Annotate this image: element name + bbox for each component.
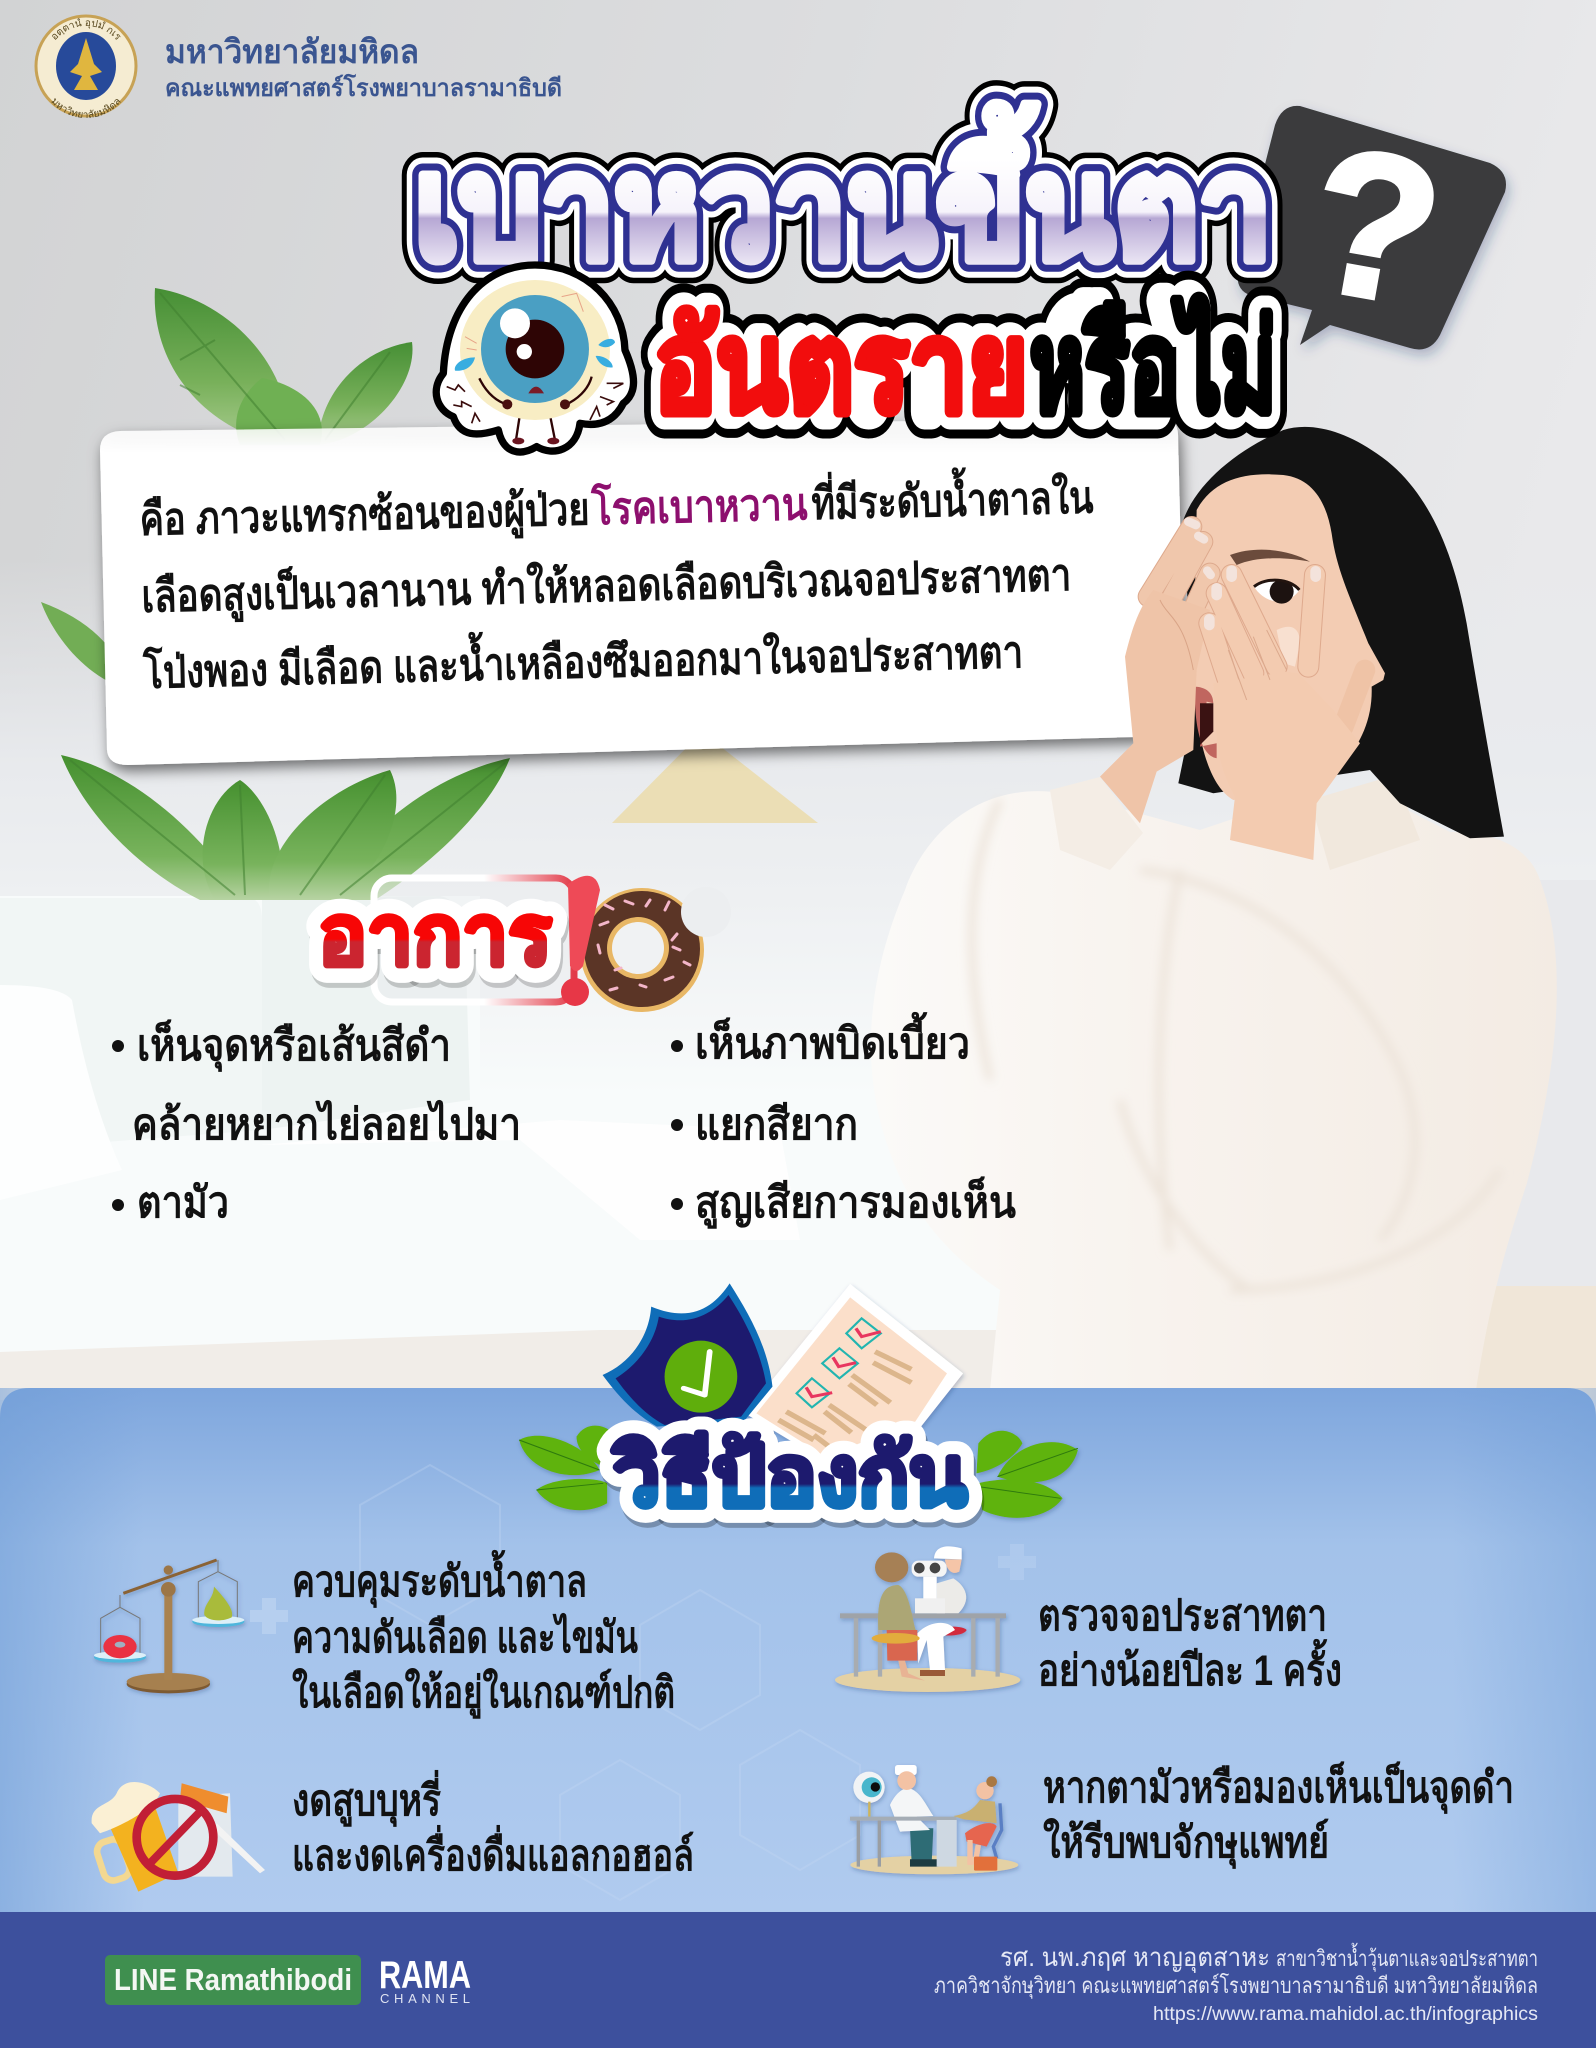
symptoms list right: สูญเสียการมองเห็น <box>695 1176 1017 1229</box>
icon: eye exam <box>835 1546 1020 1692</box>
eye <box>1254 580 1299 601</box>
icon: doctor consultation <box>850 1765 1018 1874</box>
header text: คณะแพทยศาสตร์โรงพยาบาลรามาธิบดี <box>165 73 562 102</box>
symptoms list right: เห็นภาพบิดเบี้ยว <box>695 1011 970 1068</box>
symptoms list left: เห็นจุดหรือเส้นสีดำ <box>137 1019 451 1073</box>
background: living room <box>0 0 1596 1400</box>
title line 2: หรือไม่ <box>1030 296 1276 438</box>
symptoms heading <box>318 876 731 1012</box>
header text <box>165 33 562 102</box>
prevention text left: ในเลือดให้อยู่ในเกณฑ์ปกติ <box>292 1667 675 1719</box>
plant <box>41 288 510 900</box>
header logo: มหาวิทยาลัยมหิดล <box>52 98 121 118</box>
icon: scale <box>94 1560 244 1693</box>
title line 1: เบาหวานขึ้นตา <box>414 102 1272 289</box>
prevention text left: ความดันเลือด และไขมัน <box>292 1612 638 1662</box>
RAMA channel logo <box>379 1954 471 2006</box>
hair <box>1178 427 1504 838</box>
panel: prevention <box>0 1388 1596 1915</box>
symptoms list right: แยกสียาก <box>695 1101 858 1149</box>
title line 2: อันตราย <box>654 297 1028 438</box>
leaves <box>519 1426 1078 1518</box>
title line 2: อันตรายหรือไม่ <box>654 296 1276 438</box>
prevention text left: ควบคุมระดับน้ำตาล <box>292 1549 587 1609</box>
eye character <box>436 265 634 452</box>
definition text: โรคเบาหวาน <box>590 477 808 534</box>
header text: มหาวิทยาลัยมหิดล <box>165 33 419 70</box>
lamp <box>612 732 818 823</box>
definition text: ที่มีระดับน้ำตาลใน <box>811 464 1094 529</box>
RAMA channel logo: RAMA <box>379 1954 471 1997</box>
definition text: โป่งพอง มีเลือด และน้ำเหลืองซึมออกมาในจอประสาทตา <box>142 618 1024 698</box>
title line 1: เบาหวานขึ้นตา <box>414 102 1272 289</box>
prevention text right: อย่างน้อยปีละ 1 ครั้ง <box>1038 1638 1342 1695</box>
prevention text right: ตรวจจอประสาทตา <box>1038 1592 1327 1640</box>
icons: shield and checklist <box>519 1283 1078 1518</box>
prevention text right: ให้รีบพบจักษุแพทย์ <box>1043 1817 1329 1870</box>
definition text <box>138 464 1098 698</box>
heading text: อาการ <box>318 888 552 982</box>
heading: prevention: วิธีป้องกัน <box>611 1429 967 1523</box>
header logo: อตฺตานํ อุปมํ กเร <box>52 18 121 40</box>
right hand <box>1209 571 1365 860</box>
symptoms list left: ตามัว <box>137 1179 229 1227</box>
question bubble <box>1238 103 1506 350</box>
frame <box>374 878 574 1002</box>
prevention text right <box>1038 1592 1514 1870</box>
shield <box>603 1283 772 1427</box>
icon: donut <box>580 887 731 1012</box>
LINE badge: LINE Ramathibodi <box>114 1962 352 1997</box>
RAMA channel logo: CHANNEL <box>380 1991 470 2006</box>
icon: no beer no cigarettes <box>92 1782 265 1892</box>
symptoms list left <box>112 1019 521 1227</box>
sweater <box>871 791 1557 1390</box>
prevention text left: และงดเครื่องดื่มแอลกอฮอล์ <box>292 1825 694 1880</box>
exclamation mark <box>561 876 600 1006</box>
title line 1: เบาหวานขึ้นตา <box>414 102 1272 289</box>
heading: prevention: วิธีป้องกัน <box>613 1434 969 1528</box>
footer credits: รศ. นพ.ภฤศ หาญอุตสาหะ <box>1000 1942 1270 1973</box>
title line 1: เบาหวานขึ้นตา <box>414 102 1272 289</box>
woman <box>871 427 1557 1390</box>
question bubble: ? <box>1293 103 1456 350</box>
footer credits <box>934 1942 1538 2025</box>
footer band <box>0 1912 1596 2048</box>
definition text: เลือดสูงเป็นเวลานาน ทำให้หลอดเลือดบริเวณจอประสาทตา <box>141 547 1072 625</box>
symptoms list left: คล้ายหยากไย่ลอยไปมา <box>132 1099 521 1149</box>
LINE badge <box>105 1955 361 2005</box>
heading: prevention: วิธีป้องกัน <box>611 1429 967 1523</box>
panel: definition <box>100 418 1185 765</box>
checklist paper <box>745 1284 963 1462</box>
symptoms list right <box>671 1011 1017 1229</box>
title line 2: อันตรายหรือไม่ <box>654 296 1276 438</box>
definition text: คือ ภาวะแทรกซ้อนของผู้ป่วย <box>139 483 590 548</box>
left hand <box>1100 522 1211 823</box>
face <box>1193 474 1385 800</box>
prevention text left <box>292 1549 694 1880</box>
footer credits: https://www.rama.mahidol.ac.th/infographics <box>1153 2004 1538 2025</box>
header logo <box>34 14 138 118</box>
heading text: อาการ <box>318 888 552 982</box>
heading text: อาการ <box>320 893 554 987</box>
prevention text left: งดสูบบุหรี่ <box>292 1770 441 1828</box>
